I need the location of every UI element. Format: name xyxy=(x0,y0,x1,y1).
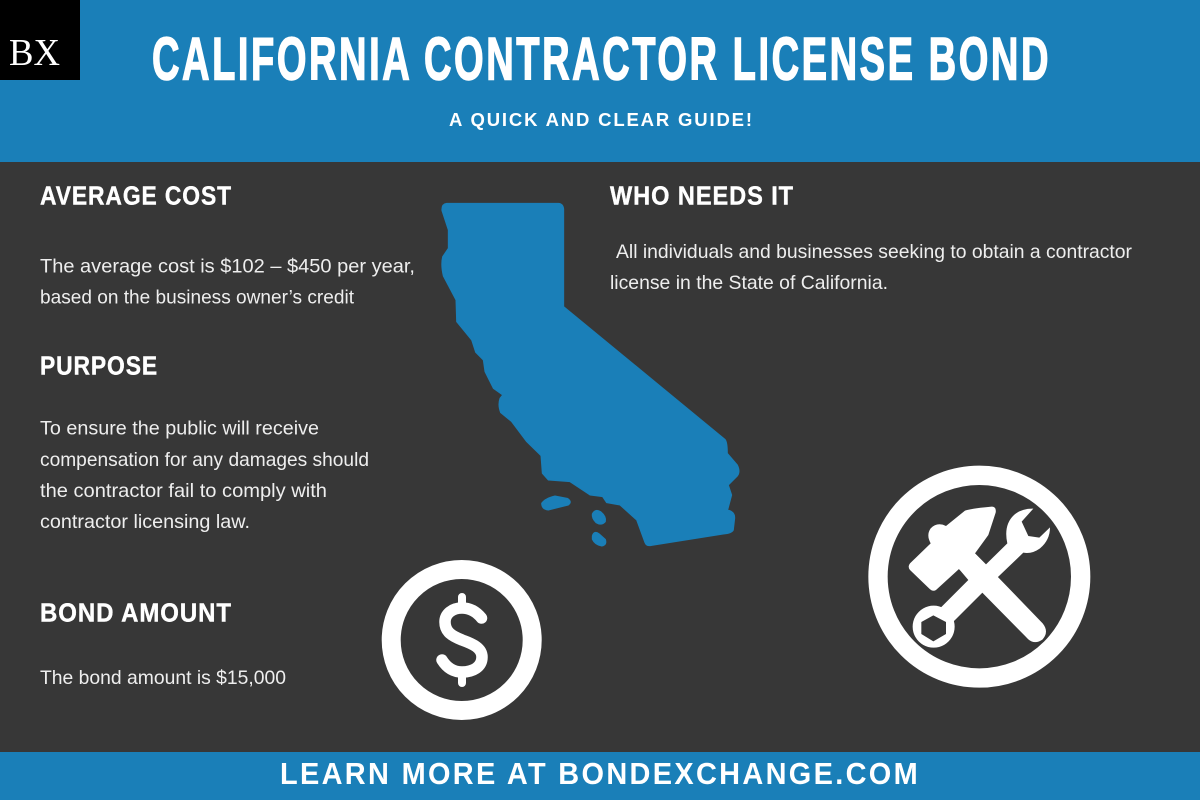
footer band xyxy=(0,752,1200,800)
panel: average cost xyxy=(40,182,415,308)
text: bond amount body: The bond amount is $15,000 xyxy=(40,667,286,689)
text: who needs it body: license in the State of California. xyxy=(610,272,888,294)
text: who needs it body: All individuals and businesses seeking to obtain a contractor xyxy=(616,241,1133,263)
icon: hammer and wrench xyxy=(878,475,1081,678)
text: average cost body: The average cost is $102 – $450 per year, xyxy=(40,256,415,278)
heading: purpose: PURPOSE xyxy=(40,352,158,380)
heading: average cost: AVERAGE COST xyxy=(40,182,232,210)
text: purpose body xyxy=(40,418,369,533)
hammer xyxy=(909,507,1046,642)
logo: BX: BX xyxy=(9,32,60,74)
panel: who needs it xyxy=(610,182,1133,294)
text: average cost body: based on the business owner’s credit xyxy=(40,286,355,308)
wrench xyxy=(913,509,1050,648)
text: who needs it body xyxy=(610,241,1133,294)
heading: who needs it: WHO NEEDS IT xyxy=(610,182,794,210)
logo: BX xyxy=(0,0,80,80)
text: average cost body xyxy=(40,256,415,308)
panel: bond amount xyxy=(40,600,286,689)
header band xyxy=(0,0,1200,162)
heading: bond amount: BOND AMOUNT xyxy=(40,600,232,628)
text: purpose body: To ensure the public will receive xyxy=(40,418,319,440)
text: purpose body: the contractor fail to comply with xyxy=(40,480,327,502)
map: California xyxy=(442,203,739,546)
panel: purpose xyxy=(40,352,369,533)
text: purpose body: contractor licensing law. xyxy=(40,511,250,533)
footer call to action: LEARN MORE AT BONDEXCHANGE.COM xyxy=(280,756,920,791)
icon: dollar coin xyxy=(391,570,532,710)
subtitle: A QUICK AND CLEAR GUIDE! xyxy=(449,109,752,130)
text: purpose body: compensation for any damages should xyxy=(40,449,369,471)
